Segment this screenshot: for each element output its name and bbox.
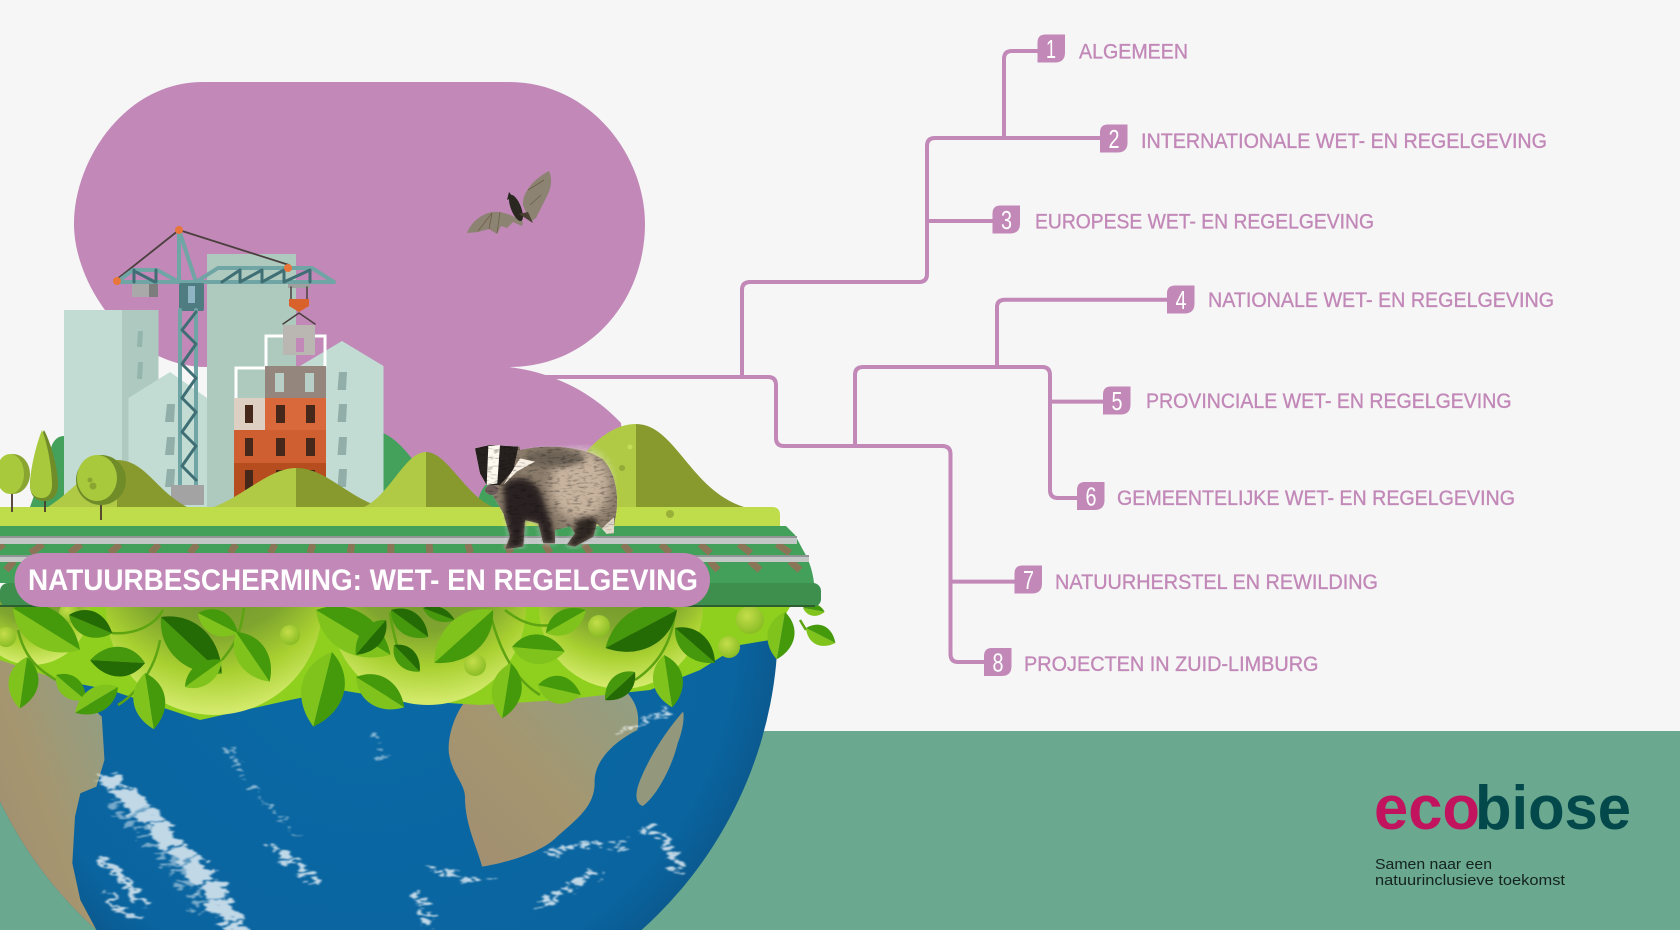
item 5: [1103, 386, 1512, 416]
item 3: 3: [1001, 205, 1012, 235]
ecobiose logo: eco: [1374, 774, 1480, 843]
item 4: [1167, 285, 1554, 315]
construction crane: [113, 226, 334, 505]
ecobiose logo: [1374, 774, 1631, 843]
continents: [0, 657, 684, 930]
item 1: [1038, 34, 1188, 64]
item 5: 5: [1112, 386, 1122, 416]
title text: NATUURBESCHERMING: WET- EN REGELGEVING: [28, 564, 698, 597]
item 2: [1100, 124, 1547, 154]
item 6: GEMEENTELIJKE WET- EN REGELGEVING: [1117, 487, 1515, 510]
item 5: PROVINCIALE WET- EN REGELGEVING: [1146, 390, 1512, 413]
green platform: [0, 526, 821, 607]
lime ground strip: [0, 507, 780, 526]
railway track: [0, 536, 809, 570]
building under construction: [234, 336, 326, 505]
item 1: ALGEMEEN: [1079, 40, 1188, 64]
item 8: [984, 648, 1318, 678]
clouds: [104, 710, 680, 930]
trees: [0, 430, 126, 520]
leaves: [3, 591, 840, 732]
vegetation under platform: [0, 600, 836, 730]
connector tree: [514, 51, 1169, 662]
item 1: 1: [1046, 34, 1056, 64]
ecobiose logo: biose: [1475, 774, 1631, 843]
droplets: [0, 603, 764, 676]
ground detail: [666, 510, 674, 518]
item 2: 2: [1108, 124, 1120, 154]
city: background hills and buildings: [30, 254, 510, 507]
title pill: [14, 553, 710, 607]
logo tagline: Samen naar een: [1375, 856, 1492, 873]
item 3: [992, 205, 1374, 235]
badger: [475, 445, 617, 549]
bat: [467, 171, 551, 234]
item 8: PROJECTEN IN ZUID-LIMBURG: [1024, 653, 1318, 676]
logo tagline: [1375, 856, 1566, 889]
foreground hills: [48, 424, 744, 507]
item 7: NATUURHERSTEL EN REWILDING: [1055, 571, 1378, 594]
item 7: [1014, 565, 1378, 595]
item 2: INTERNATIONALE WET- EN REGELGEVING: [1141, 130, 1547, 153]
logo tagline: natuurinclusieve toekomst: [1375, 872, 1566, 889]
item 3: EUROPESE WET- EN REGELGEVING: [1035, 210, 1374, 234]
item 6: [1077, 482, 1515, 512]
item 4: NATIONALE WET- EN REGELGEVING: [1208, 289, 1554, 312]
item 4: 4: [1176, 285, 1186, 315]
item 8: 8: [992, 648, 1004, 678]
item 6: 6: [1086, 482, 1096, 512]
green footer band: [0, 731, 1680, 930]
item 7: 7: [1023, 565, 1034, 595]
pink number eight shape: [74, 82, 645, 510]
vines: [18, 608, 806, 705]
earth globe: [0, 640, 776, 930]
